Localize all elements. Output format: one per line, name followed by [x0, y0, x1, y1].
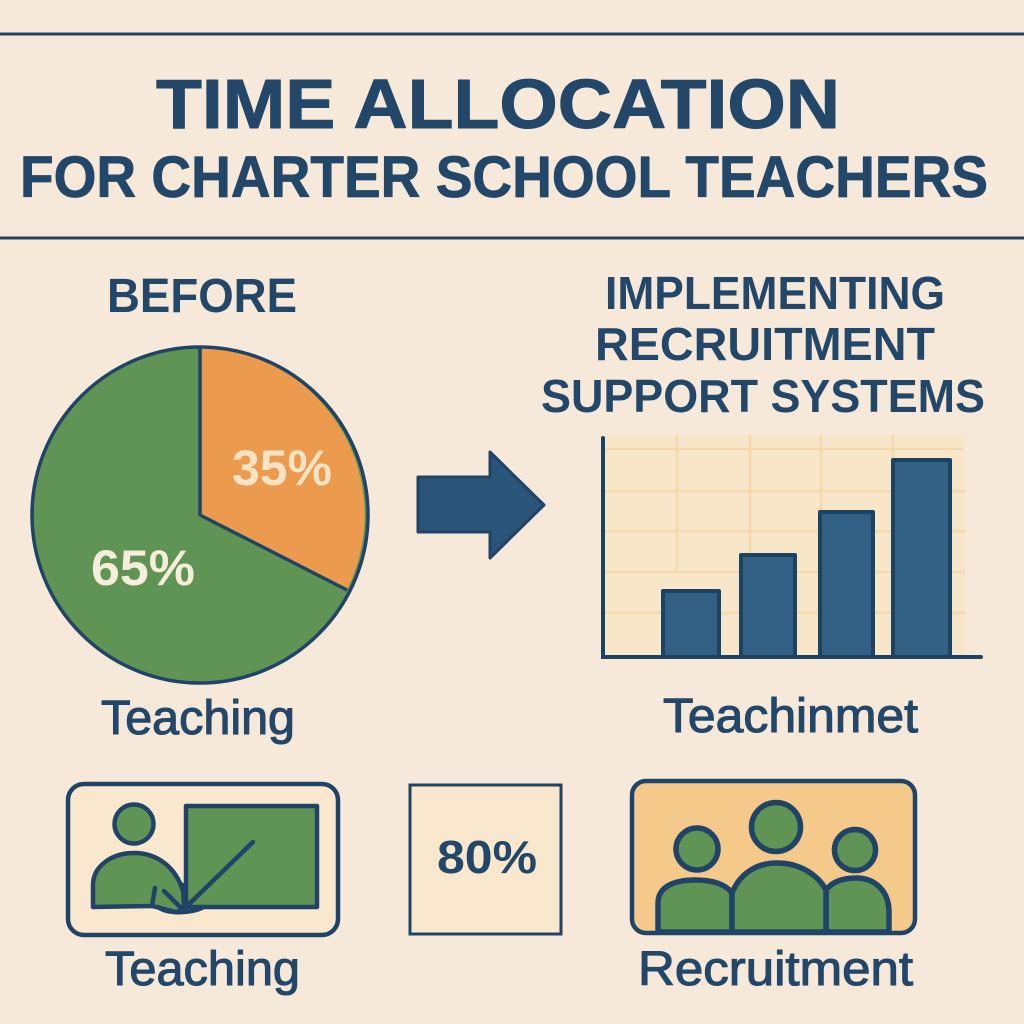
title: FOR CHARTER SCHOOL TEACHERS: [20, 145, 988, 210]
heading: implementing recruitment support systems: SUPPORT SYSTEMS: [541, 370, 985, 422]
heading: implementing recruitment support systems: IMPLEMENTING: [605, 267, 945, 319]
stat box: 80%: [410, 785, 561, 934]
icon: recruitment group: [632, 781, 915, 933]
icon: teacher at board: [68, 784, 338, 935]
title: [20, 65, 988, 210]
label: teachinmet (bars): Teachinmet: [663, 690, 918, 743]
label: teaching (icon): Teaching: [105, 943, 300, 996]
pie chart: 65%: [91, 540, 195, 596]
arrow: [418, 452, 544, 558]
heading: implementing recruitment support systems: RECRUITMENT: [595, 318, 935, 370]
pie chart: [32, 347, 368, 683]
pie chart: 35%: [232, 440, 332, 496]
label: recruitment (icon): Recruitment: [638, 943, 913, 996]
label: teaching (pie): Teaching: [101, 692, 295, 745]
title: TIME ALLOCATION: [156, 65, 840, 143]
heading: before: BEFORE: [107, 270, 297, 323]
bar chart: [603, 435, 981, 657]
heading: implementing recruitment support systems: [541, 267, 985, 422]
stat box: 80%: 80%: [437, 831, 537, 883]
